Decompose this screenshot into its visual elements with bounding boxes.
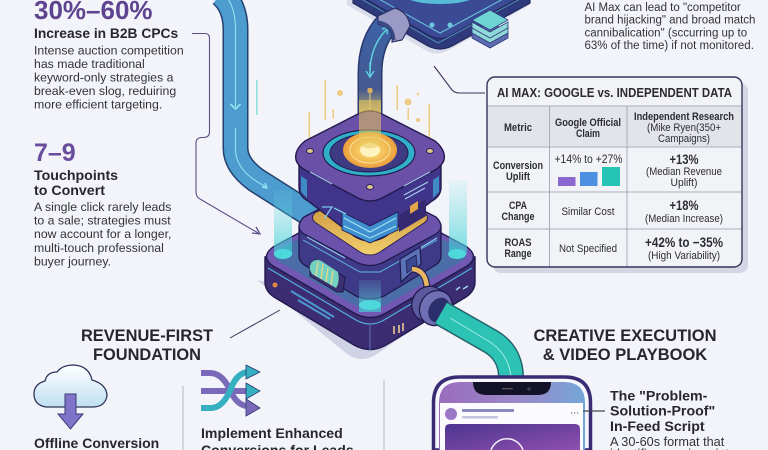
row CPA change: +18% xyxy=(670,198,698,213)
row ROAS range: ROAS xyxy=(504,237,532,249)
heading: creative execution and video playbook: & VIDEO PLAYBOOK xyxy=(543,346,707,364)
row ROAS range: Not Specified xyxy=(559,243,617,255)
upper block of device xyxy=(296,111,444,243)
text: problem-solution-proof script xyxy=(610,388,730,450)
row ROAS range: (High Variability) xyxy=(648,250,720,262)
pipe connector ring back xyxy=(405,280,459,332)
phone mockup xyxy=(434,377,590,450)
label: implement enhanced conversions: Implement Enhanced xyxy=(201,425,343,441)
top circuit board platform xyxy=(347,0,530,54)
row CPA change xyxy=(502,198,723,225)
header row: Independent Research xyxy=(634,111,734,123)
row CPA change: CPA xyxy=(509,200,527,212)
row conversion uplift: +14% to +27% xyxy=(554,154,622,166)
rivets xyxy=(306,148,434,190)
text: problem-solution-proof script: In-Feed Script xyxy=(610,419,705,435)
sparks xyxy=(308,80,430,150)
header row: Google Official xyxy=(555,117,621,129)
icon: cloud download xyxy=(34,365,107,429)
stat: 30%-60% increase in B2B CPCs: Increase in B2B CPCs xyxy=(34,26,178,41)
row CPA change: Change xyxy=(502,211,534,223)
glowing columns xyxy=(274,180,467,312)
stat: 7-9 touchpoints to convert: to Convert xyxy=(34,183,105,199)
stat: 30%-60% increase in B2B CPCs: has made traditional xyxy=(34,57,145,71)
stat: 30%-60% increase in B2B CPCs xyxy=(34,0,184,112)
stat: 7-9 touchpoints to convert: A single click rarely leads xyxy=(34,200,171,214)
text: problem-solution-proof script: The "Problem- xyxy=(610,388,708,404)
stat: 7-9 touchpoints to convert: 7–9 xyxy=(34,139,76,167)
stat: 7-9 touchpoints to convert: to a sale; strategies must xyxy=(34,214,171,228)
row conversion uplift: Conversion xyxy=(493,160,543,172)
row ROAS range: +42% to −35% xyxy=(645,235,723,250)
stat: 7-9 touchpoints to convert: multi-touch professional xyxy=(34,241,164,255)
warning text top right: cannibalication" (sccurring up to xyxy=(584,28,747,40)
row CPA change: Similar Cost xyxy=(562,206,614,218)
header row xyxy=(504,111,734,145)
row conversion uplift: Uplift xyxy=(506,171,530,183)
header row: Campaigns) xyxy=(658,133,710,145)
stat: 30%-60% increase in B2B CPCs: keyword-only strategies a xyxy=(34,70,174,84)
table panel: AI Max Google vs Independent xyxy=(487,77,748,273)
heading: revenue-first foundation xyxy=(81,327,213,364)
stat: 30%-60% increase in B2B CPCs: break-even slog, reduiring xyxy=(34,84,176,98)
stat: 7-9 touchpoints to convert xyxy=(34,139,171,268)
stat: 30%-60% increase in B2B CPCs: more efficient targeting. xyxy=(34,98,162,112)
warning text top right: AI Max can lead to "competitor xyxy=(584,2,741,14)
cyan spark xyxy=(256,80,258,115)
label: implement enhanced conversions xyxy=(201,425,354,450)
leader line to device base xyxy=(230,310,280,338)
pipe elbow collar xyxy=(378,8,410,42)
stat: 7-9 touchpoints to convert: Touchpoints xyxy=(34,168,118,184)
icon: shuffle arrows xyxy=(201,365,260,416)
warning text top right xyxy=(584,2,755,52)
stacked chip on platform xyxy=(472,10,508,48)
row conversion uplift: +13% xyxy=(670,152,698,167)
stat: 7-9 touchpoints to convert: buyer journey. xyxy=(34,254,111,268)
blue pipe from top left into device xyxy=(221,0,316,218)
middle tray xyxy=(299,190,441,299)
stat: 30%-60% increase in B2B CPCs: Intense auction competition xyxy=(34,44,184,58)
heading: revenue-first foundation: FOUNDATION xyxy=(93,346,201,364)
device base xyxy=(257,199,475,359)
bracket connector line xyxy=(192,34,260,234)
header row: Metric xyxy=(504,122,532,134)
header row: Claim xyxy=(576,128,600,140)
port with yellow cable xyxy=(400,247,427,294)
row ROAS range: Range xyxy=(504,248,532,260)
connector line to table xyxy=(434,66,485,93)
pipe from platform down to device xyxy=(366,24,388,142)
vent on tray xyxy=(310,259,345,292)
text: problem-solution-proof script: Solution-Proof" xyxy=(610,404,715,420)
header row: (Mike Ryen(350+ xyxy=(647,122,721,134)
row conversion uplift: (Median Revenue xyxy=(646,166,722,178)
heading: creative execution and video playbook: CREATIVE EXECUTION xyxy=(533,327,717,345)
stat: 7-9 touchpoints to convert: now account for a longer, xyxy=(34,227,171,241)
callout line from phone xyxy=(583,410,605,412)
row conversion uplift xyxy=(493,152,722,189)
table title: AI MAX: GOOGLE vs. INDEPENDENT DATA xyxy=(497,85,733,100)
text: problem-solution-proof script: A 30-60s format that xyxy=(610,435,725,449)
teal pipe to phone xyxy=(441,313,511,378)
heading: creative execution and video playbook xyxy=(533,327,717,364)
row CPA change: (Median Increase) xyxy=(645,213,723,225)
divider xyxy=(183,380,384,450)
top face glowing core xyxy=(323,100,415,176)
heading: revenue-first foundation: REVENUE-FIRST xyxy=(81,327,213,345)
warning text top right: brand hijacking" and broad match xyxy=(584,14,755,26)
warning text top right: 63% of the time) if not monitored. xyxy=(584,40,754,52)
row ROAS range xyxy=(504,235,723,262)
row conversion uplift: Uplift) xyxy=(670,177,698,189)
